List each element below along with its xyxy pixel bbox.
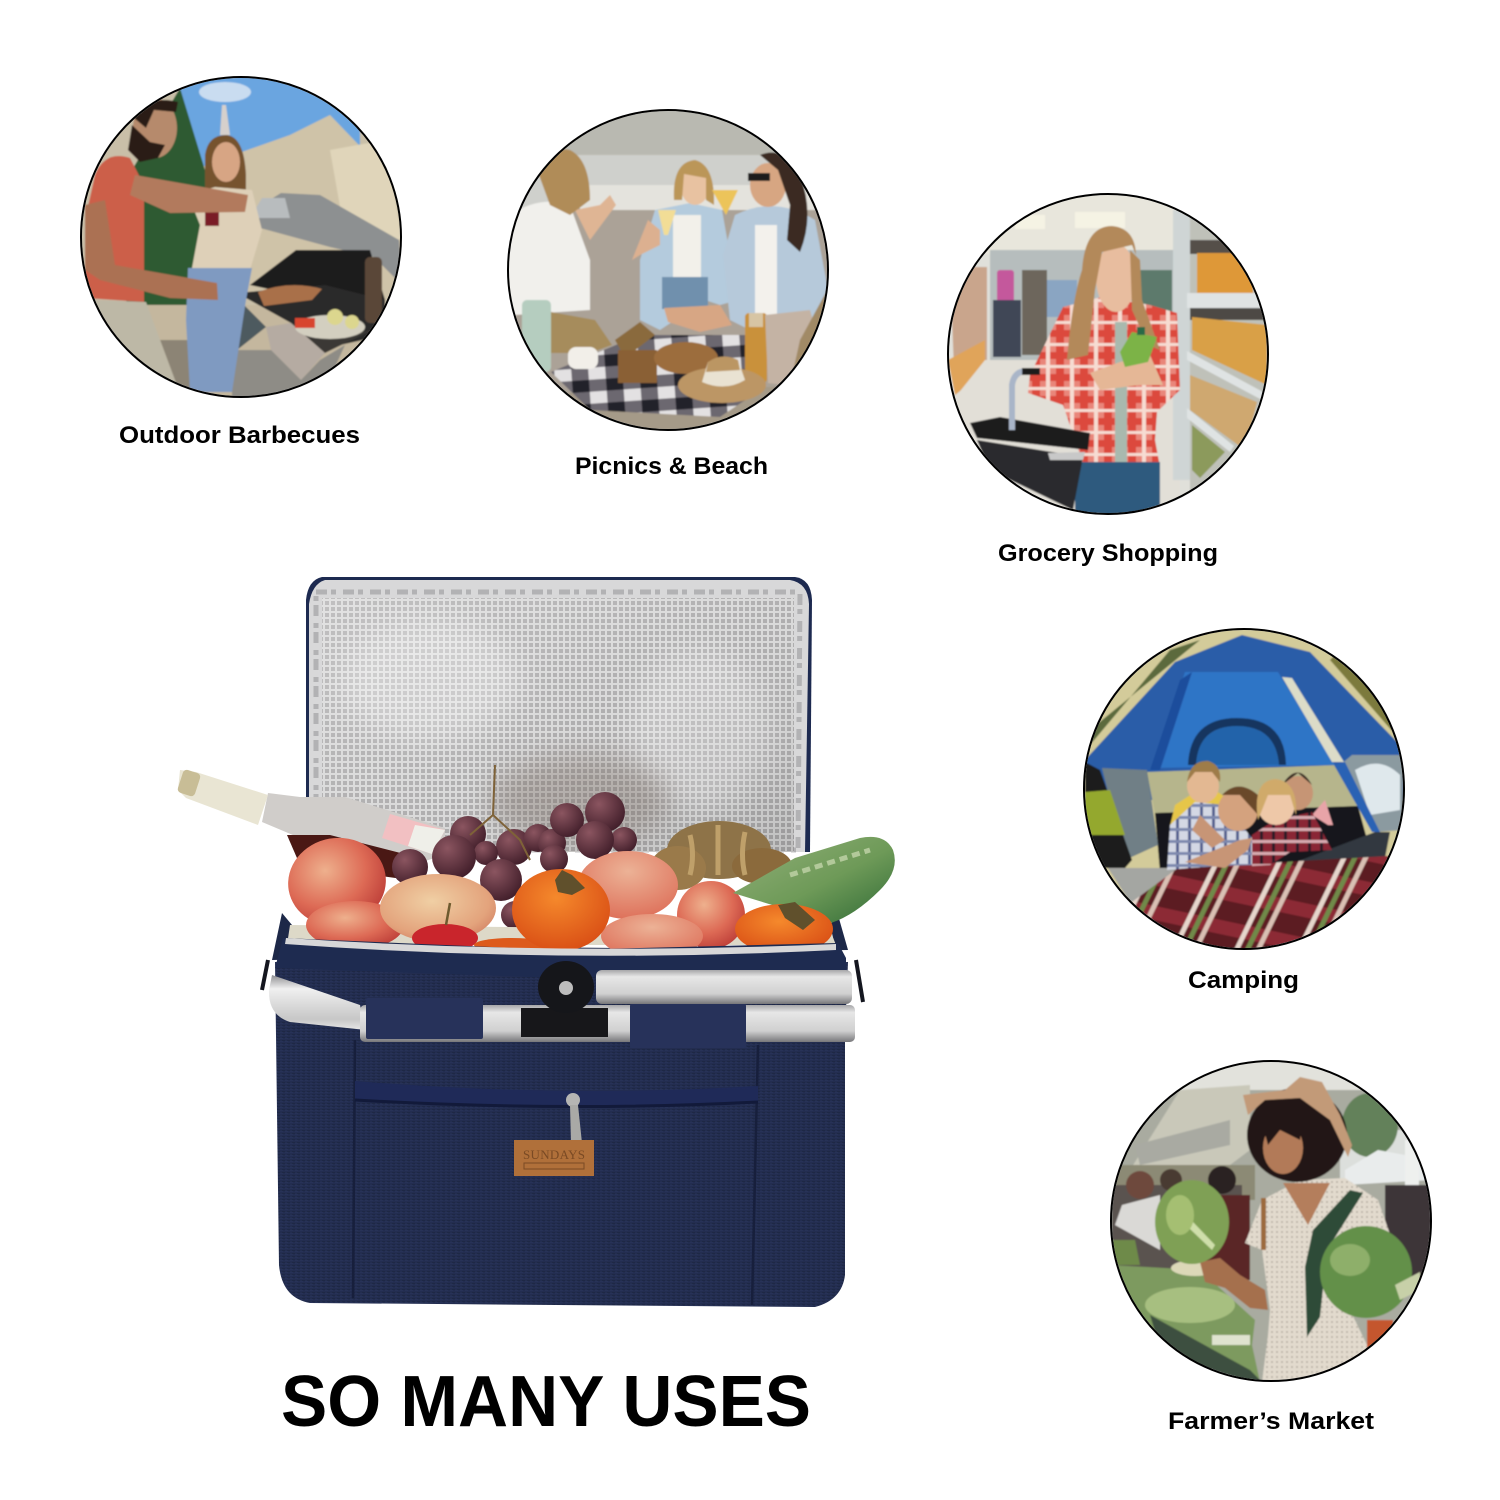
pumpkin: [650, 821, 792, 890]
label: picnics and beach: Picnics & Beach: [575, 453, 768, 480]
woman: [205, 135, 246, 190]
circle photo: farmer's market: [1110, 1060, 1432, 1382]
fruit: [281, 830, 895, 958]
grapes: [392, 765, 637, 929]
label: grocery shopping: Grocery Shopping: [998, 540, 1218, 567]
circle photo: outdoor barbecues: [80, 76, 402, 400]
family: [1169, 792, 1224, 825]
front pocket: [353, 1040, 758, 1305]
basket: [977, 440, 1083, 510]
label: outdoor barbecues: Outdoor Barbecues: [119, 422, 360, 449]
title: SO MANY USES: [281, 1362, 811, 1442]
center woman: [640, 203, 738, 330]
items: [522, 300, 551, 372]
brand label: SUNDAYS: [523, 1147, 585, 1162]
right woman: [723, 206, 828, 335]
bottle: [177, 769, 445, 880]
left woman: [505, 202, 590, 315]
product: cooler bag with food: [177, 577, 895, 1307]
woman: [1028, 296, 1180, 467]
label: farmer's market: Farmer’s Market: [1168, 1408, 1374, 1435]
bag lid: silver lining: [306, 577, 812, 852]
grill: [258, 192, 400, 278]
circle photo: picnics and beach: [505, 110, 830, 430]
man: [133, 98, 177, 158]
bag body: [275, 962, 848, 1307]
brand label: [514, 1140, 594, 1176]
front rim: zipper and foil: [275, 938, 846, 978]
woman: [1245, 1178, 1392, 1382]
back rim of bag: [272, 913, 848, 960]
circle photo: camping: [1084, 629, 1406, 951]
label: camping: Camping: [1188, 967, 1299, 994]
circle photo: grocery shopping: [948, 194, 1270, 517]
handles: [262, 960, 863, 1048]
